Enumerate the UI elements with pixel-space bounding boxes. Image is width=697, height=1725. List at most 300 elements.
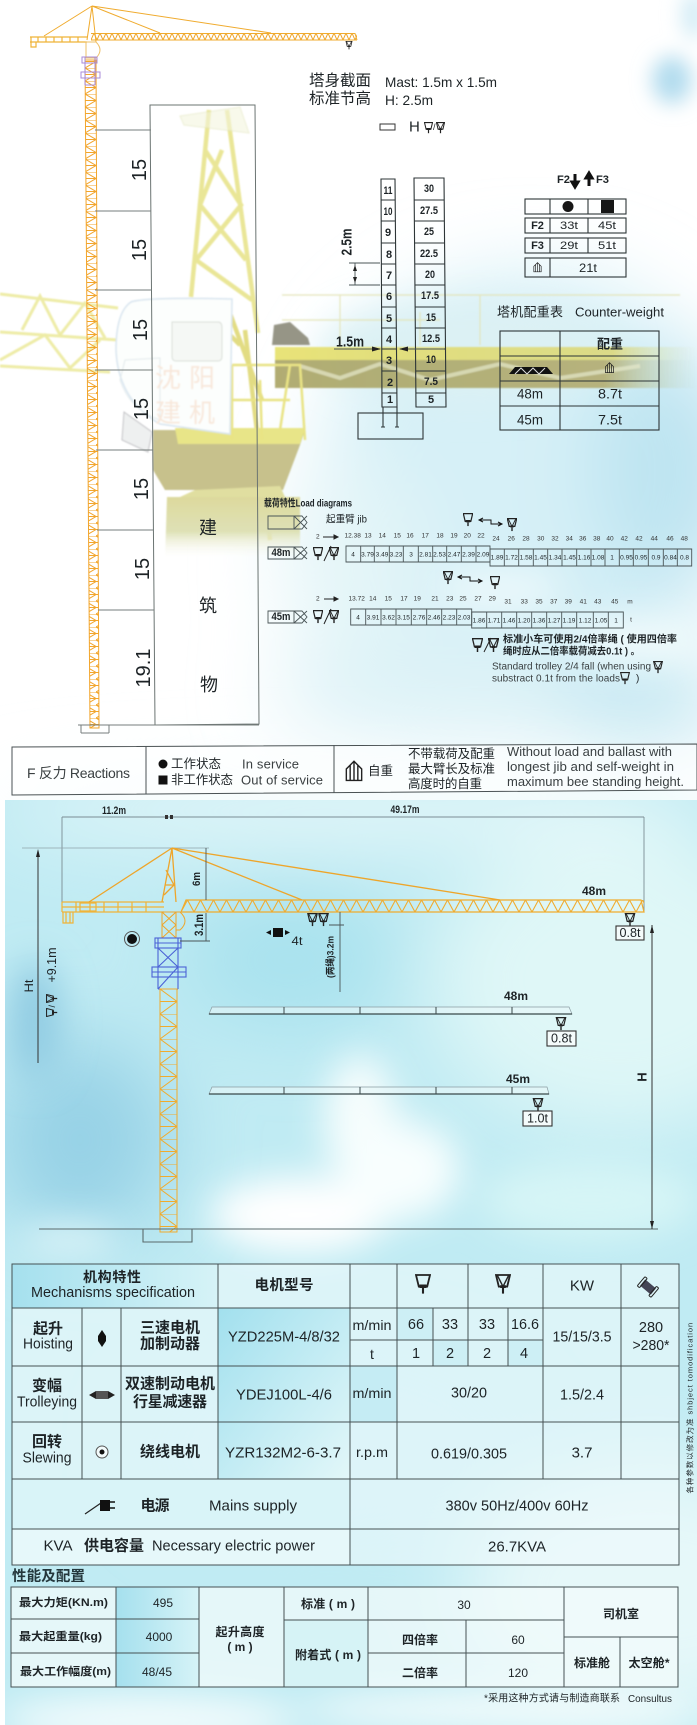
load table 45m: 2.23 xyxy=(443,614,456,622)
load table 45m: 1.20 xyxy=(518,618,531,624)
load table 45m: 3.62 xyxy=(382,614,395,622)
load table 48m: 3 xyxy=(409,552,413,558)
left performance values xyxy=(19,1595,173,1679)
table cell fills xyxy=(12,1264,679,1565)
row: hoisting: 起升 xyxy=(33,1320,63,1338)
footnote xyxy=(484,1692,672,1705)
load table 45m: 1.12 xyxy=(579,618,592,624)
section count column: 3 xyxy=(386,355,392,367)
dimension 2.5m xyxy=(338,228,380,285)
height column: 25 xyxy=(424,226,434,238)
performance cell fills xyxy=(11,1587,678,1687)
row: mains supply: 电源 xyxy=(140,1498,170,1514)
section count column: 2 xyxy=(387,377,393,389)
overall dimensions xyxy=(22,804,644,912)
row: mains supply: 380v 50Hz/400v 60Hz xyxy=(446,1498,588,1514)
Ht dimension xyxy=(22,849,59,1063)
height column: 22.5 xyxy=(420,248,438,260)
lower crane body photo xyxy=(153,430,305,490)
row: hoisting: 2 xyxy=(446,1346,454,1362)
height column: 27.5 xyxy=(420,205,438,217)
radius scale 45m: 15 xyxy=(385,596,392,602)
row: trolleying: YDEJ100L-4/6 xyxy=(236,1386,332,1404)
radius scale 45m: 33 xyxy=(521,598,528,606)
radius scale 45m: 19 xyxy=(414,596,421,602)
row: trolleying: 双速制动电机 xyxy=(125,1376,215,1392)
left performance values: 4000 xyxy=(146,1630,173,1644)
trolley note: Standard trolley 2/4 fall (when using xyxy=(492,662,651,672)
alternate jib 48m xyxy=(209,989,576,1046)
tie lines and heights xyxy=(78,130,259,733)
reactions table F2 F3: 29t xyxy=(560,240,578,252)
section count column: 5 xyxy=(386,313,392,325)
load table 45m: 3.15 xyxy=(397,614,410,622)
row: KVA: KVA xyxy=(44,1538,72,1554)
radius scale 48m: 22 xyxy=(477,532,485,540)
footnote: *采用这种方式请与制造商联系 xyxy=(484,1692,620,1704)
load table 48m: 3.23 xyxy=(390,552,403,558)
lower sky base xyxy=(5,800,697,1725)
building label: 建 xyxy=(199,518,217,538)
building outline xyxy=(150,105,259,725)
radius scale 48m: 19 xyxy=(450,532,458,540)
row: hoisting: 280 xyxy=(639,1320,663,1336)
row: hoisting: 三速电机 xyxy=(140,1320,200,1336)
ground line and foundation xyxy=(39,1229,658,1242)
table header: 电机型号 xyxy=(254,1277,314,1294)
load table 48m: 1.58 xyxy=(520,554,533,562)
radius scale 48m: 34 xyxy=(566,536,573,542)
counter-weight table: 7.5t xyxy=(598,412,622,428)
load table 48m label: 48m xyxy=(272,547,291,559)
dimension 3.1m: 3.1m xyxy=(192,914,206,936)
row: slewing: 3.7 xyxy=(572,1444,592,1462)
height 15: 15 xyxy=(131,478,153,500)
service states: Out of service xyxy=(241,772,323,788)
jib legend: 起重臂 jib xyxy=(326,512,367,526)
counter jib xyxy=(62,902,164,923)
trolley note xyxy=(472,632,677,684)
horizontal boom photo xyxy=(272,295,697,388)
load table 48m: 2.09 xyxy=(477,552,490,558)
lifting height values: 起升高度 xyxy=(216,1624,264,1639)
dimension 6m: 6m xyxy=(191,872,203,886)
height column: 5 xyxy=(428,394,434,406)
height column xyxy=(414,178,446,407)
row: mains supply xyxy=(85,1498,588,1514)
height column: 20 xyxy=(425,269,435,281)
radius scale 45m: 43 xyxy=(594,598,602,606)
alternate jib 48m: 48m xyxy=(504,989,528,1003)
row: slewing: 0.619/0.305 xyxy=(431,1446,507,1462)
height 15: 15 xyxy=(131,398,153,420)
trolley note: 绳时应从二倍率载荷减去0.1t ) 。 xyxy=(503,644,640,658)
alternate jib 48m: 0.8t xyxy=(551,1032,573,1046)
height column: 30 xyxy=(424,183,434,195)
dimension 6m xyxy=(191,848,206,900)
load table 45m label xyxy=(268,609,339,624)
radius scale 48m: 32 xyxy=(551,536,559,542)
operator cab values xyxy=(574,1606,670,1670)
height 15: 15 xyxy=(129,159,151,181)
trolley note: 标准小车可使用2/4倍率绳 ( 使用四倍率 xyxy=(503,632,677,646)
operator cab photo: 沈阳 xyxy=(155,363,215,393)
lifting height values: 120 xyxy=(508,1666,528,1680)
main mast xyxy=(160,989,177,1232)
row: hoisting: 33 xyxy=(442,1317,458,1333)
row: hoisting: 15/15/3.5 xyxy=(552,1328,612,1346)
tip load 0.8t: 0.8t xyxy=(620,926,641,940)
load table 48m: 1 xyxy=(610,554,614,562)
radius scale 45m: 14 xyxy=(369,596,377,602)
operator cab photo xyxy=(116,298,232,452)
row: KVA: 26.7KVA xyxy=(488,1538,546,1556)
operator cab values: 标准舱 xyxy=(574,1655,610,1670)
load table 45m: 1.05 xyxy=(595,618,608,624)
load table 48m xyxy=(346,546,692,566)
lifting height values: 30 xyxy=(457,1598,471,1612)
counter-weight table: 配重 xyxy=(597,336,623,352)
reactions table F2 F3 xyxy=(525,173,626,277)
row: hoisting: 1 xyxy=(412,1346,420,1362)
row: trolleying: 行星减速器 xyxy=(133,1394,207,1410)
Ht dimension: / xyxy=(47,1004,57,1008)
left performance values: 48/45 xyxy=(142,1665,172,1679)
service states: 工作状态 xyxy=(171,757,221,771)
load table 48m: 2.39 xyxy=(462,552,475,558)
trolley direction icons row 45m xyxy=(443,572,500,589)
load table 48m: 1.89 xyxy=(491,554,504,562)
self-weight note: Without load and ballast with xyxy=(507,745,672,759)
row: KVA xyxy=(44,1536,546,1556)
main jib xyxy=(181,900,644,912)
radius scale 48m: 46 xyxy=(666,536,674,542)
load diagrams xyxy=(264,496,692,684)
alternate jib 45m: 45m xyxy=(506,1072,530,1086)
small crane elevation with building ties xyxy=(30,6,357,733)
load table 45m: 1.27 xyxy=(548,618,561,624)
performance table xyxy=(11,1587,678,1687)
reactions table F2 F3: 33t xyxy=(560,220,578,232)
row: trolleying: Trolleying xyxy=(17,1394,77,1410)
main crane elevation drawing xyxy=(22,804,658,1242)
radius scale 45m: 23 xyxy=(446,596,454,602)
height column: 17.5 xyxy=(421,290,439,302)
radius scale 48m: 42 xyxy=(635,536,643,542)
service states: In service xyxy=(242,756,299,772)
radius scale 48m: 2 xyxy=(316,534,320,540)
load table 48m: 1.08 xyxy=(592,554,605,562)
load table 48m: 3.79 xyxy=(361,552,374,558)
radius scale 45m xyxy=(316,596,633,606)
slewing unit xyxy=(162,912,185,938)
load table 45m: 2.03 xyxy=(458,614,471,622)
main hook xyxy=(308,914,328,926)
top crane jib xyxy=(91,33,357,40)
reactions label: F 反力 Reactions xyxy=(27,765,130,781)
load table 48m: 2.81 xyxy=(419,552,432,558)
height 15: 15 xyxy=(132,558,154,580)
load table 45m xyxy=(351,609,632,628)
row: slewing: 回转 xyxy=(32,1434,62,1450)
top crane mast xyxy=(85,60,99,728)
radius scale 48m: 36 xyxy=(579,536,587,542)
load table 48m: 1.16 xyxy=(578,554,591,562)
left jib truss photo xyxy=(0,294,118,372)
reactions table F2 F3: 51t xyxy=(598,240,616,252)
climbing frame xyxy=(81,57,100,85)
radius scale 45m: 39 xyxy=(565,598,572,606)
slewing circle xyxy=(86,42,100,58)
lifting height values: ( m ) xyxy=(227,1640,253,1654)
F2 F3 heading: F3 xyxy=(596,174,609,186)
footnote: Consultus xyxy=(628,1693,672,1705)
row: slewing xyxy=(22,1434,592,1466)
row: trolleying xyxy=(17,1376,604,1410)
building label xyxy=(199,518,218,695)
trolley symbol and 4t xyxy=(266,928,303,948)
radius scale 48m: 15 xyxy=(394,532,401,540)
load table 45m: 2.76 xyxy=(413,614,426,622)
load table 45m: 2.46 xyxy=(428,614,441,622)
side note: 各种参数以修改为准 shbject tomodification xyxy=(684,1322,694,1494)
load table 48m: 1.34 xyxy=(549,554,562,562)
lifting height values: 60 xyxy=(511,1633,525,1647)
load table 45m: 1.36 xyxy=(533,618,546,624)
reactions table F2 F3: 45t xyxy=(598,220,616,232)
load diagrams heading: 载荷特性Load diagrams xyxy=(264,496,352,510)
lifting height values: 四倍率 xyxy=(402,1632,438,1647)
trolley direction icons row 48m xyxy=(463,514,517,531)
section count column: 11 xyxy=(384,185,392,197)
row: hoisting: 2 xyxy=(483,1346,491,1362)
height column: 7.5 xyxy=(424,376,438,388)
section count column: 4 xyxy=(386,334,393,346)
load table 48m: 4 xyxy=(351,552,355,558)
service states: 非工作状态 xyxy=(171,773,233,787)
mast lattice photo xyxy=(191,110,270,540)
radius scale 45m: 25 xyxy=(459,596,467,602)
load table 45m: 1.86 xyxy=(473,618,486,624)
radius scale 48m: 13 xyxy=(364,532,372,540)
lifting height values xyxy=(216,1596,528,1680)
table header: Mechanisms specification xyxy=(31,1285,195,1301)
load table 45m: 3.91 xyxy=(367,614,380,622)
dimension 3.2m two-fall xyxy=(324,912,344,992)
left performance values: 最大起重量(kg) xyxy=(19,1629,102,1643)
dimension 3.1m xyxy=(180,913,210,941)
radius scale 45m: 21 xyxy=(431,596,439,602)
F2 F3 heading xyxy=(557,173,609,187)
mast section specs: 塔身截面 xyxy=(309,72,371,90)
self-weight note: 不带载荷及配重 xyxy=(408,746,495,761)
table header xyxy=(31,1269,659,1301)
mast section specs: 标准节高 xyxy=(309,90,371,108)
lifting height values: 附着式 ( m ) xyxy=(295,1647,361,1662)
F2 F3 heading: F2 xyxy=(557,174,570,186)
radius scale 48m: 12.38 xyxy=(345,532,361,540)
tip load 0.8t xyxy=(616,914,644,940)
reactions table F2 F3: 21t xyxy=(579,261,598,275)
load table 48m: 3.49 xyxy=(376,552,389,558)
left performance values: 最大力矩(KN.m) xyxy=(19,1595,108,1609)
self-weight note: 最大臂长及标准 xyxy=(408,762,495,776)
row: hoisting: 4 xyxy=(520,1346,528,1362)
radius scale 48m: 20 xyxy=(464,532,471,540)
radius scale 45m: 13.72 xyxy=(349,596,365,602)
load table 45m: 1.46 xyxy=(503,618,516,624)
service states xyxy=(158,756,323,788)
load table 48m: 0.95 xyxy=(620,554,633,562)
performance heading: 性能及配置 xyxy=(12,1567,85,1585)
alternate jib 45m xyxy=(209,1072,552,1126)
operator cab values: 司机室 xyxy=(603,1606,639,1621)
jib label 48m: 48m xyxy=(582,884,606,898)
section legend: / xyxy=(433,122,436,132)
lifting height values: 二倍率 xyxy=(402,1665,438,1680)
section count column: 7 xyxy=(386,270,392,282)
row: hoisting: 加制动器 xyxy=(140,1336,200,1352)
mechanisms specification table xyxy=(12,1264,679,1565)
table grid xyxy=(12,1264,679,1565)
radius scale 48m: 18 xyxy=(436,532,444,540)
height column: 15 xyxy=(426,312,436,324)
building label: 筑 xyxy=(199,596,217,616)
section legend: H xyxy=(409,118,420,136)
row: mains supply: Mains supply xyxy=(209,1498,297,1514)
load table 45m: t xyxy=(630,616,632,624)
row: hoisting: Hoisting xyxy=(23,1336,73,1352)
dimension 3.2m two-fall: (两绳)3.2m xyxy=(324,936,336,978)
load table 48m: 1.72 xyxy=(505,554,518,562)
row: slewing: Slewing xyxy=(22,1450,72,1466)
radius scale 48m: 48 xyxy=(681,536,688,542)
left performance values: 495 xyxy=(153,1596,173,1610)
table header: 机构特性 xyxy=(83,1269,141,1285)
load table 45m: 4 xyxy=(356,614,360,622)
radius scale 48m xyxy=(316,532,688,542)
load table 48m label xyxy=(268,546,339,561)
climbing cage xyxy=(152,938,186,989)
section count column: 9 xyxy=(385,227,391,239)
left performance values: 最大工作幅度(m) xyxy=(20,1664,111,1678)
radius scale 45m: 31 xyxy=(504,598,512,606)
self-weight note: 高度时的自重 xyxy=(408,776,482,791)
radius scale 45m: 17 xyxy=(400,596,408,602)
height 15: 15 xyxy=(129,239,151,261)
self-weight note xyxy=(346,745,684,791)
load table 48m: 1.45 xyxy=(563,554,576,562)
row: trolleying: 30/20 xyxy=(451,1384,487,1402)
section legend xyxy=(380,118,444,136)
row: slewing: 绕线电机 xyxy=(140,1442,200,1460)
radius scale 48m: 16 xyxy=(406,532,414,540)
height 15: 15 xyxy=(130,319,152,341)
H dimension: H xyxy=(634,1072,650,1082)
performance grid xyxy=(11,1587,678,1687)
load table 48m: 0.8 xyxy=(680,554,689,562)
radius scale 48m: 24 xyxy=(492,536,500,542)
load table 48m: 1.45 xyxy=(534,554,547,562)
row: hoisting: t xyxy=(370,1346,374,1362)
row: hoisting xyxy=(23,1317,670,1362)
section count column: 10 xyxy=(384,206,392,218)
load table 48m: 2.53 xyxy=(433,552,446,558)
section count column: 1 xyxy=(387,394,393,406)
load table 48m: 0.9 xyxy=(651,554,661,562)
row: hoisting: YZD225M-4/8/32 xyxy=(228,1328,340,1346)
dimension 1.5m: 1.5m xyxy=(336,334,364,350)
radius scale 48m: 44 xyxy=(651,536,658,542)
counter-weight table: 48m xyxy=(517,386,543,402)
mast section specs: H: 2.5m xyxy=(385,92,433,108)
Ht dimension: +9.1m xyxy=(45,948,59,982)
row: hoisting: 66 xyxy=(408,1317,424,1333)
counter-weight table: 塔机配重表 xyxy=(497,304,563,320)
row: trolleying: 变幅 xyxy=(32,1376,62,1394)
radius scale 45m: 37 xyxy=(550,598,558,606)
counter-weight table: 8.7t xyxy=(598,386,622,402)
lifting height values: 标准 ( m ) xyxy=(301,1596,355,1611)
section count column: 6 xyxy=(386,291,392,303)
radius scale 45m: 35 xyxy=(535,598,543,606)
top crane ties xyxy=(44,6,271,42)
top crane counter jib xyxy=(30,37,87,47)
load table 45m label: 45m xyxy=(272,611,291,623)
jib legend xyxy=(268,512,367,529)
photo: crane behind the diagram xyxy=(0,107,697,560)
height 19.1: 19.1 xyxy=(133,649,155,687)
top crane hook xyxy=(346,41,352,49)
load table 48m: 0.95 xyxy=(635,554,648,562)
radius scale 48m: 38 xyxy=(593,536,601,542)
tower head and ties xyxy=(89,848,500,902)
trolley symbol and 4t: 4t xyxy=(292,934,303,948)
row: trolleying: m/min xyxy=(352,1385,392,1401)
height column: 10 xyxy=(426,354,436,366)
overall dimensions: 49.17m xyxy=(390,804,420,816)
radius scale 48m: 14 xyxy=(379,532,386,540)
row: KVA: Necessary electric power xyxy=(152,1538,315,1554)
overall dimensions: 11.2m xyxy=(102,805,126,817)
load table 45m: 1.19 xyxy=(563,618,576,624)
slewing symbol xyxy=(124,932,140,946)
table header: KW xyxy=(570,1278,595,1294)
counter-weight table xyxy=(497,304,664,430)
radius scale 48m: 30 xyxy=(537,536,545,542)
row: hoisting: 33 xyxy=(479,1317,495,1333)
operator cab photo: 建机 xyxy=(155,398,215,428)
radius scale 48m: 28 xyxy=(522,536,530,542)
radius scale 48m: 26 xyxy=(508,536,515,542)
radius scale 48m: 17 xyxy=(422,532,429,540)
reactions table F2 F3: F2 xyxy=(531,220,544,232)
radius scale 45m: 41 xyxy=(580,598,587,606)
load table 48m: 2.47 xyxy=(448,552,461,558)
row: hoisting: 16.6 xyxy=(511,1317,539,1333)
reactions legend bar xyxy=(12,744,697,795)
section count column xyxy=(381,179,397,407)
self-weight note: maximum bee standing height. xyxy=(507,775,684,789)
row: slewing: YZR132M2-6-3.7 xyxy=(225,1444,341,1462)
load table 48m: 0.84 xyxy=(664,554,677,562)
dimension 2.5m: 2.5m xyxy=(338,228,356,256)
load table 45m: 1 xyxy=(614,618,618,624)
load table 45m: 1.71 xyxy=(488,618,501,624)
row: KVA: 供电容量 xyxy=(84,1536,144,1554)
winch icon xyxy=(637,1277,659,1297)
trolley note: ) xyxy=(636,674,639,684)
